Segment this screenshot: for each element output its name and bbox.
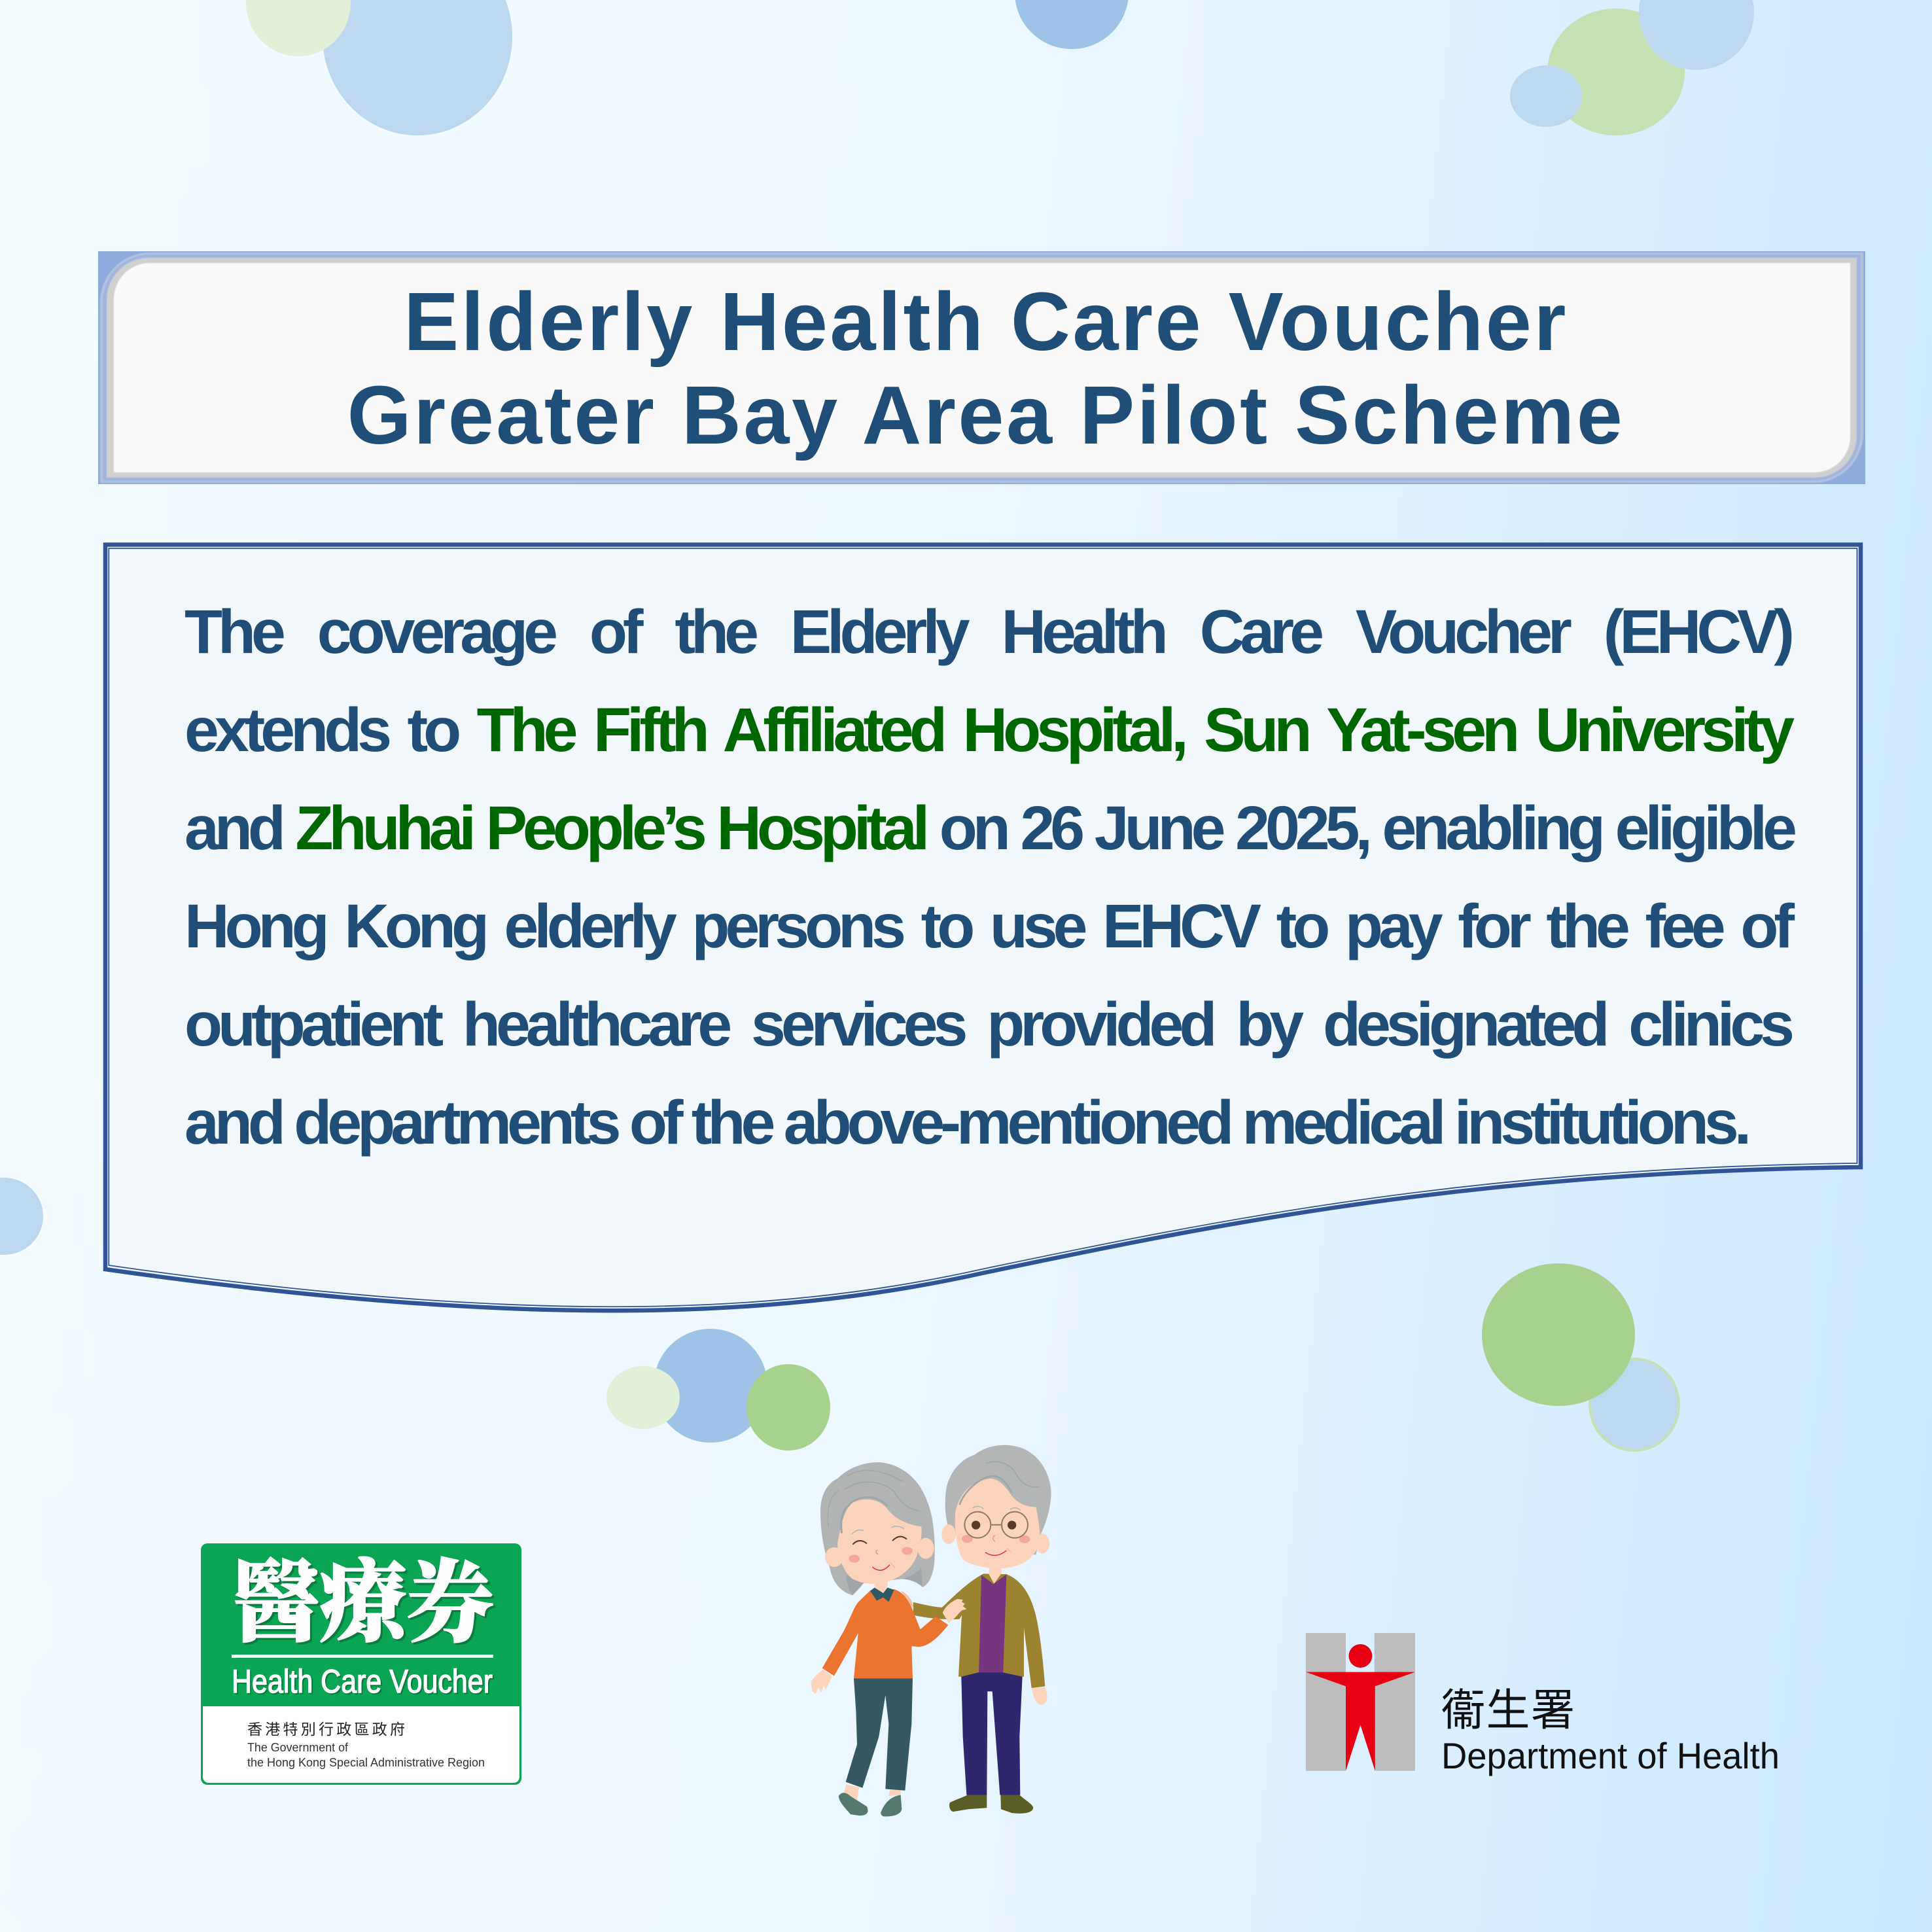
hands on shoulder and chest: [901, 1591, 966, 1623]
text: department name: Department of Health: [1441, 1735, 1780, 1776]
illustration: elderly couple: [811, 1445, 1051, 1816]
logo: Health Care Voucher: The Government of: [247, 1741, 349, 1754]
text: department name: 衞生署: [1441, 1686, 1575, 1735]
icon: Department of Health emblem: [1306, 1633, 1415, 1771]
text: department name: [1441, 1686, 1780, 1776]
heading: title text: [347, 275, 1625, 461]
text block: body paragraph: extends to The Fifth Affiliated Hospital, Sun Yat-sen University: [184, 695, 1790, 765]
text block: body paragraph: [184, 597, 1795, 1157]
woman: [811, 1462, 948, 1816]
heading: title text: Greater Bay Area Pilot Scheme: [347, 369, 1625, 461]
text block: body paragraph: Hong Kong elderly persons to use EHCV to pay for the fee of: [184, 892, 1790, 961]
logo: Health Care Voucher: the Hong Kong Special Administrative Region: [247, 1756, 485, 1769]
text block: body paragraph: and departments of the above-mentioned medical institutions.: [184, 1088, 1747, 1157]
logo: Health Care Voucher: 香港特別行政區政府: [247, 1721, 405, 1738]
heading: title text: Elderly Health Care Voucher: [404, 275, 1568, 368]
logo: Health Care Voucher: [201, 1531, 521, 1785]
text block: body paragraph: and Zhuhai People’s Hospital on 26 June 2025, enabling eligible: [184, 794, 1793, 863]
logo: Health Care Voucher: Health Care Voucher: [232, 1663, 493, 1700]
panel: wave body box: [103, 542, 1863, 1312]
logo: Health Care Voucher: 醫療券: [232, 1531, 494, 1659]
man: [913, 1445, 1051, 1814]
panel: title banner: [98, 251, 1865, 484]
logo: Department of Health: [1306, 1633, 1780, 1776]
text block: body paragraph: The coverage of the Elderly Health Care Voucher (EHCV): [184, 597, 1790, 667]
text block: body paragraph: outpatient healthcare services provided by designated clinics: [184, 990, 1790, 1059]
